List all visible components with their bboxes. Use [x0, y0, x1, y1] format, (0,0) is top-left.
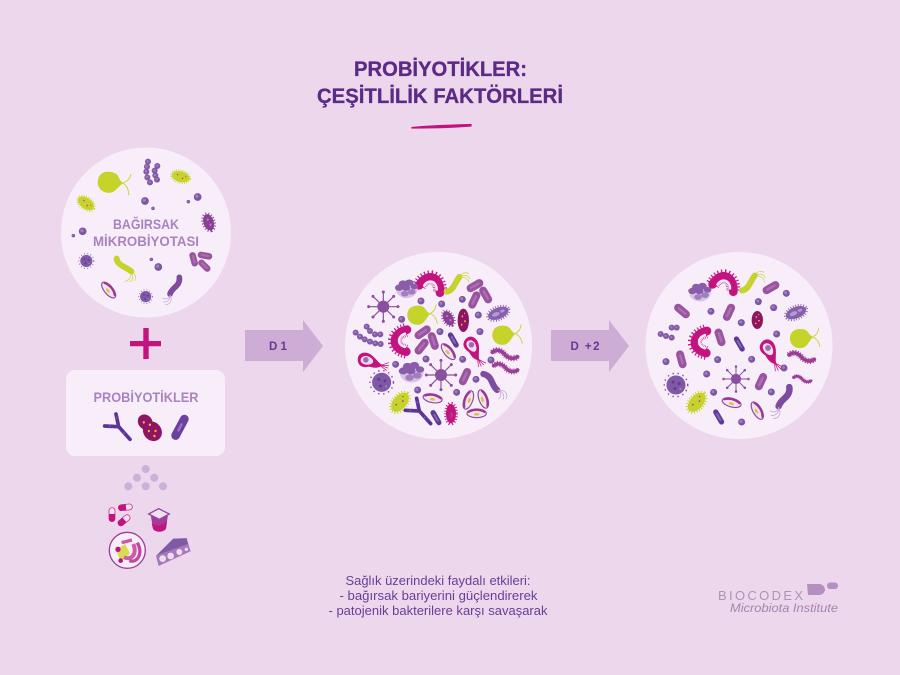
- magenta cell: [358, 353, 389, 371]
- spiky purple: [486, 304, 511, 323]
- circle background: [646, 252, 832, 439]
- virus: [79, 254, 94, 268]
- title: [317, 58, 563, 108]
- coccus chains: [353, 324, 384, 347]
- dark rod: [733, 335, 746, 353]
- lime drop bacterium: [96, 169, 132, 197]
- Y-shaped bacterium: [105, 414, 130, 439]
- virus: [664, 373, 688, 397]
- microbes: [353, 273, 522, 426]
- spiky purple: [784, 303, 808, 322]
- small spiky rod: [440, 309, 457, 328]
- rods: [672, 280, 781, 392]
- cluster: [688, 283, 711, 301]
- lime spiky: [170, 169, 191, 185]
- panel: microbiota on day 1: [345, 252, 532, 439]
- rods: [413, 278, 494, 387]
- lime drop: [790, 328, 820, 348]
- icon: plate of food: [109, 532, 145, 568]
- icon: capsules: [109, 503, 133, 528]
- logo: Biocodex Microbiota Institute: BIOCODEX: [718, 588, 803, 603]
- red peanut bacterium: [133, 410, 166, 445]
- cocci: [72, 193, 202, 271]
- dark rod: [430, 409, 442, 426]
- label: MİKROBİYOTASI: [93, 233, 199, 249]
- panel: microbiota on day +2: [646, 252, 832, 439]
- circle background: [61, 148, 231, 318]
- flagellated rod: [770, 387, 789, 419]
- flagellated rod: [477, 374, 512, 402]
- lime flagellated: [117, 259, 136, 282]
- worms: [492, 350, 518, 372]
- text block: health benefits: Sağlık üzerindeki faydalı etkileri:: [346, 574, 530, 588]
- magenta cell: [754, 337, 790, 373]
- title: ÇEŞİTLİLİK FAKTÖRLERİ: [317, 85, 563, 108]
- lime flagellated: [447, 273, 470, 292]
- dark rod: [447, 331, 460, 349]
- logo: Biocodex Microbiota Institute: [718, 582, 838, 615]
- cocci: [662, 290, 790, 425]
- spiky crescent: [712, 273, 737, 292]
- icon: yogurt: [149, 509, 169, 532]
- spiky crescent: [419, 274, 444, 293]
- magenta cell: [458, 334, 493, 369]
- spiky crescent: [695, 331, 707, 353]
- cluster: [395, 279, 418, 298]
- red oval: [458, 309, 469, 332]
- cluster: [399, 362, 424, 383]
- lime spiky: [387, 389, 413, 416]
- coccus chains: [143, 159, 160, 185]
- spiky rod: [201, 212, 217, 232]
- virus: [370, 371, 393, 394]
- icon group: food sources: [109, 503, 191, 568]
- lime flagellated: [742, 271, 765, 290]
- blue-violet rod: [170, 413, 190, 441]
- title: PROBİYOTİKLER:: [354, 58, 527, 81]
- label: PROBİYOTİKLER: [94, 389, 198, 405]
- worms: [789, 353, 814, 382]
- red oval: [752, 311, 763, 329]
- icon: cheese: [156, 538, 191, 566]
- panel: gut microbiota circle: [61, 148, 231, 318]
- arrow: D +2: [551, 320, 629, 372]
- label: [93, 215, 199, 249]
- lime spiky: [75, 193, 97, 213]
- arrow: D 1: [245, 320, 323, 372]
- coccus chain: [658, 325, 680, 341]
- box background: [66, 370, 225, 456]
- small magenta crescent: [446, 404, 456, 423]
- arrow: D 1: D 1: [269, 341, 288, 353]
- plus sign: [130, 328, 161, 359]
- title underline: [412, 124, 471, 128]
- logo: Biocodex Microbiota Institute: Microbiota Institute: [730, 601, 838, 615]
- rods: [189, 251, 213, 273]
- label: BAĞIRSAK: [113, 215, 179, 232]
- text block: health benefits: [328, 574, 548, 618]
- phage star: [367, 290, 399, 323]
- lenses: [721, 396, 766, 421]
- microbes: [72, 159, 217, 305]
- phage star: [425, 359, 457, 391]
- dark rod: [712, 408, 725, 426]
- panel: probiotics box: [66, 370, 225, 456]
- microbes: [658, 271, 820, 426]
- lime drop: [492, 324, 522, 345]
- lens: [439, 341, 458, 362]
- cocci: [392, 296, 494, 396]
- arrow: D +2: D +2: [570, 341, 600, 353]
- text block: health benefits: - patojenik bakterilere karşı savaşarak: [328, 604, 548, 618]
- Y bacterium: [405, 398, 431, 424]
- spiky crescent: [395, 330, 407, 352]
- lens bacterium: [99, 280, 118, 300]
- text block: health benefits: - bağırsak bariyerini güçlendirerek: [340, 589, 538, 603]
- virus: [139, 290, 153, 304]
- probiotic icons: [105, 410, 190, 445]
- lime spiky: [684, 389, 709, 416]
- lenses: [422, 388, 491, 418]
- lime drop: [407, 304, 437, 325]
- circle background: [345, 252, 532, 439]
- phage star: [722, 365, 750, 393]
- falling dots: [124, 465, 167, 490]
- flagellated rod: [163, 277, 179, 305]
